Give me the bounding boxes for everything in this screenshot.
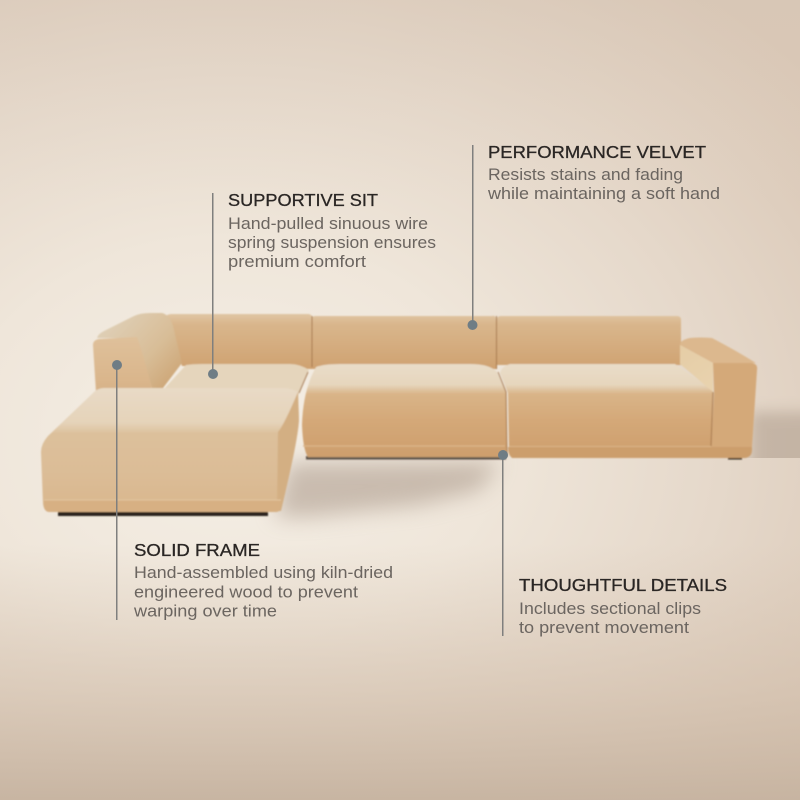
floor shadows [275, 412, 800, 517]
callout: performance velvet [468, 142, 720, 330]
description: warping over time [133, 602, 277, 620]
right arm front face [711, 363, 757, 447]
right arm inner face [680, 345, 713, 392]
center back cushion [311, 316, 496, 369]
right seat [500, 364, 713, 447]
sectional sofa [41, 313, 757, 516]
center seat [302, 364, 507, 457]
description: Hand-assembled using kiln-dried [134, 564, 393, 582]
description: premium comfort [228, 253, 366, 271]
description: Hand-pulled sinuous wire [228, 215, 428, 233]
center seat base band [303, 445, 505, 447]
leader line and dot [112, 360, 122, 620]
right base band [508, 447, 752, 458]
heading: SOLID FRAME [134, 540, 260, 560]
callout: supportive sit [208, 190, 436, 379]
chaise body [41, 388, 299, 512]
description: Includes sectional clips [519, 600, 701, 618]
left seat cushion [163, 364, 309, 396]
description: while maintaining a soft hand [487, 185, 720, 203]
leader line and dot [498, 450, 508, 636]
heading: SUPPORTIVE SIT [228, 190, 378, 210]
leader line and dot [468, 145, 478, 330]
description: Resists stains and fading [488, 166, 683, 184]
left back cushion [166, 314, 312, 369]
description: spring suspension ensures [228, 234, 436, 252]
description [487, 166, 720, 203]
heading: THOUGHTFUL DETAILS [519, 575, 727, 595]
leader line and dot [208, 193, 218, 379]
chaise base band [44, 500, 281, 512]
seam shadows [299, 316, 713, 457]
description [519, 600, 701, 637]
description [228, 215, 436, 271]
chaise side [277, 392, 299, 511]
sofa feet [58, 456, 742, 516]
callout: solid frame [112, 360, 393, 620]
left arm top and inner face [97, 313, 182, 388]
heading: PERFORMANCE VELVET [488, 142, 706, 162]
description: to prevent movement [519, 619, 689, 637]
left arm front face [93, 337, 152, 392]
callout: thoughtful details [498, 450, 727, 637]
description [133, 564, 393, 620]
right back cushion [497, 316, 681, 365]
right arm top [680, 338, 756, 363]
description: engineered wood to prevent [134, 584, 358, 602]
